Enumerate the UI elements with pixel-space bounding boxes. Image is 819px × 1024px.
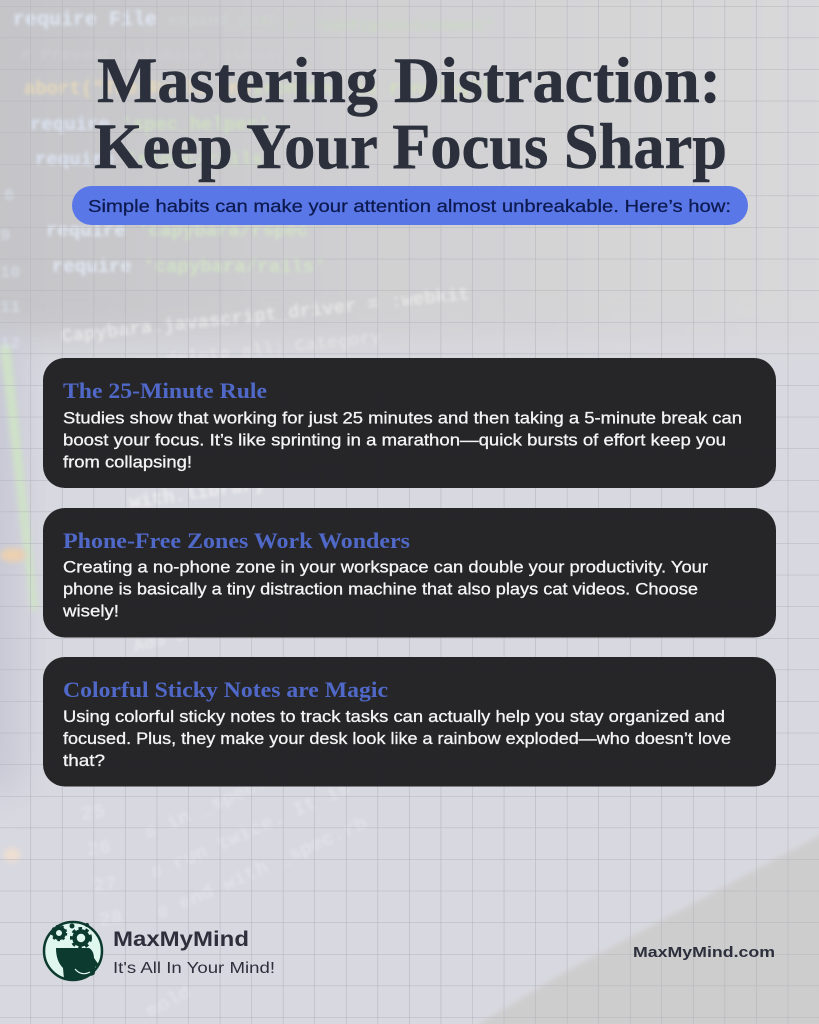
background: blurred code screen: 27 xyxy=(92,873,119,899)
text: 25-minute rule body: from collapsing! xyxy=(63,454,192,472)
website url: MaxMyMind.com xyxy=(633,944,775,961)
text: phone-free zones body: phone is basically a tiny distraction machine that also plays cat videos. Choose xyxy=(63,580,698,598)
panel: the 25-minute rule xyxy=(43,358,776,488)
background: blurred code screen: 28 xyxy=(98,907,125,933)
background: blurred code screen: mold xyxy=(142,981,196,1024)
background: blurred code screen: # run twice. It is xyxy=(147,778,354,886)
heading: colorful sticky notes: Colorful Sticky Notes are Magic xyxy=(63,677,388,702)
background: blurred code screen: with.library :rails xyxy=(128,462,345,514)
background: blurred code screen: 25 xyxy=(80,801,107,827)
panel: phone-free zones xyxy=(43,508,776,638)
background: blurred code screen: Category.delete_all; Category xyxy=(69,328,382,381)
text: phone-free zones body xyxy=(62,558,709,620)
title xyxy=(94,45,727,183)
background: blurred code screen: 9 xyxy=(0,227,10,246)
heading: phone-free zones: Phone-Free Zones Work Wonders xyxy=(63,528,410,553)
background: blurred code screen: 12 xyxy=(0,335,20,354)
text: colorful sticky notes body xyxy=(63,708,731,770)
background: blurred code screen: 6 xyxy=(4,187,14,206)
background: blurred code screen: 10 xyxy=(0,264,20,283)
title: Keep Your Focus Sharp xyxy=(94,111,727,183)
text: colorful sticky notes body: Using colorful sticky notes to track tasks can actually help you stay organized and xyxy=(63,708,725,726)
text: phone-free zones body: wisely! xyxy=(62,602,119,620)
subtitle pill xyxy=(72,186,748,225)
text: 25-minute rule body xyxy=(63,410,742,472)
subtitle pill: Simple habits can make your attention almost unbreakable. Here’s how: xyxy=(88,196,731,216)
brand name: MaxMyMind xyxy=(113,928,249,951)
text: colorful sticky notes body: that? xyxy=(63,752,105,770)
background: blurred code screen: # end with _spec.rb xyxy=(153,813,371,926)
background: blurred code screen: require File.expand_path( xyxy=(13,9,290,32)
background: blurred code screen: require 'spec_helper' xyxy=(30,114,269,136)
text: colorful sticky notes body: focused. Plus, they make your desk look like a rainbow exploded—who doesn’t love xyxy=(63,730,731,748)
background: blurred code screen: 11 xyxy=(0,299,20,318)
background: blurred code screen: require 'capybara/rails' xyxy=(52,256,326,278)
tagline: It's All In Your Mind! xyxy=(113,960,275,977)
title: Mastering Distraction: xyxy=(97,45,721,117)
background: blurred code screen: # in _spec.rb If you xyxy=(141,728,370,846)
background: blurred code screen: require 'capybara/rspec' xyxy=(46,220,320,242)
panel: colorful sticky notes xyxy=(43,657,776,786)
background: blurred code screen: require 'rspec/rails' xyxy=(35,149,274,171)
text: 25-minute rule body: Studies show that working for just 25 minutes and then taking a 5-minute break can xyxy=(63,410,742,428)
text: phone-free zones body: Creating a no-phone zone in your workspace can double your productivity. Your xyxy=(63,558,709,576)
background: blurred code screen: Add additional xyxy=(132,602,283,658)
background: blurred code screen: "../../config/environment" xyxy=(260,18,494,35)
heading: 25-minute rule: The 25-Minute Rule xyxy=(63,378,267,403)
background: blurred code screen: abort("The Rails environment is running") xyxy=(24,78,492,100)
background: blurred code screen: 26 xyxy=(86,837,113,863)
text: 25-minute rule body: boost your focus. It’s like sprinting in a marathon—quick bursts of effort keep you xyxy=(63,432,726,450)
background: blurred code screen: Capybara.javascript_driver = :webkit xyxy=(60,283,471,348)
background: blurred code screen: # Prevent database truncation xyxy=(20,47,316,66)
icon: MaxMyMind logo xyxy=(44,922,102,980)
